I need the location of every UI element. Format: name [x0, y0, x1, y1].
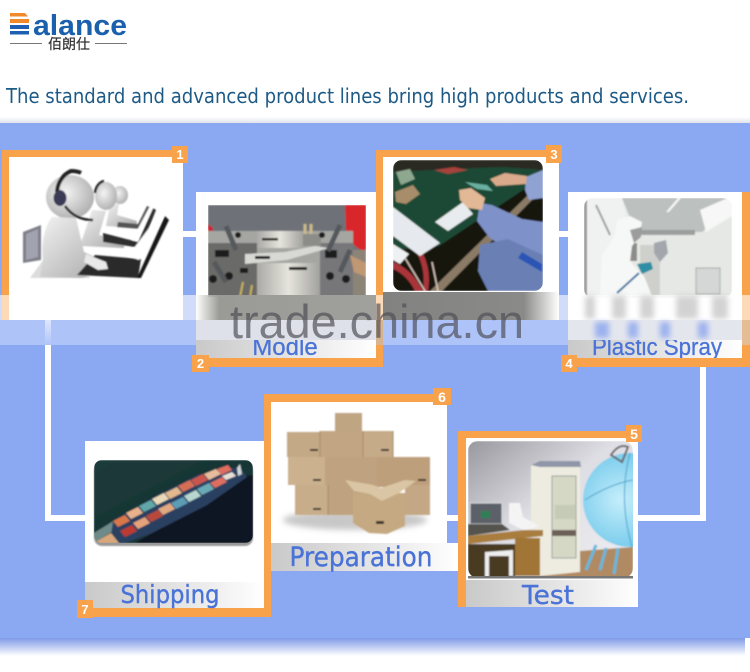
badge 6: 6 — [438, 389, 446, 405]
badge 7: 7 — [81, 602, 89, 617]
badge 4: 4 — [565, 356, 573, 371]
panel: step 6 preparation — [264, 394, 459, 617]
logo wordmark: alance — [33, 10, 127, 42]
label: Test: Test — [521, 581, 574, 611]
logo chinese name: 佰朗仕 — [48, 34, 90, 54]
arms — [477, 203, 543, 260]
panel: step 4 plastic spray — [562, 192, 750, 367]
band lower — [0, 320, 750, 345]
badge 5 — [626, 425, 642, 442]
panel: step 1 — [2, 150, 183, 320]
panel: step 5 test — [458, 431, 638, 607]
badge 2 — [192, 355, 209, 372]
keyboards — [393, 207, 440, 256]
badge 2: 2 — [197, 356, 204, 371]
photo: mold — [208, 205, 366, 297]
badge 3: 3 — [550, 147, 558, 162]
logo mark stripes — [10, 13, 29, 34]
badge 4 — [561, 355, 577, 372]
label: Modle: Modle — [252, 334, 318, 361]
badge 3 — [546, 145, 562, 163]
photo: assembly — [393, 160, 543, 291]
label: Shipping: Shipping — [120, 580, 220, 609]
photo: ship — [94, 460, 253, 546]
logo — [10, 10, 127, 54]
photo: test lab — [468, 441, 633, 576]
panel: step 3 assembly — [376, 150, 559, 320]
badge 1: 1 — [176, 147, 184, 162]
connectors — [45, 231, 706, 521]
front figure — [30, 171, 169, 278]
photo: boxes — [283, 413, 430, 534]
panel: step 7 shipping — [77, 441, 271, 617]
band upper — [0, 292, 750, 320]
watermark band — [0, 292, 750, 348]
icon: call center figures — [23, 171, 169, 278]
badge 7 — [77, 600, 93, 618]
back figures — [80, 181, 156, 248]
badge 1 — [172, 146, 188, 163]
watermark text: trade.china.cn — [230, 295, 524, 348]
badge 6 — [433, 388, 451, 405]
cables and dark floor — [393, 186, 543, 291]
label: Preparation: Preparation — [290, 542, 432, 573]
panel: step 2 mold — [192, 150, 383, 367]
label: Plastic Spray: Plastic Spray — [592, 334, 722, 361]
heading: The standard and advanced product lines bring high products and services. — [5, 84, 689, 108]
badge 5: 5 — [630, 426, 638, 442]
photo: spray booth — [584, 196, 732, 298]
